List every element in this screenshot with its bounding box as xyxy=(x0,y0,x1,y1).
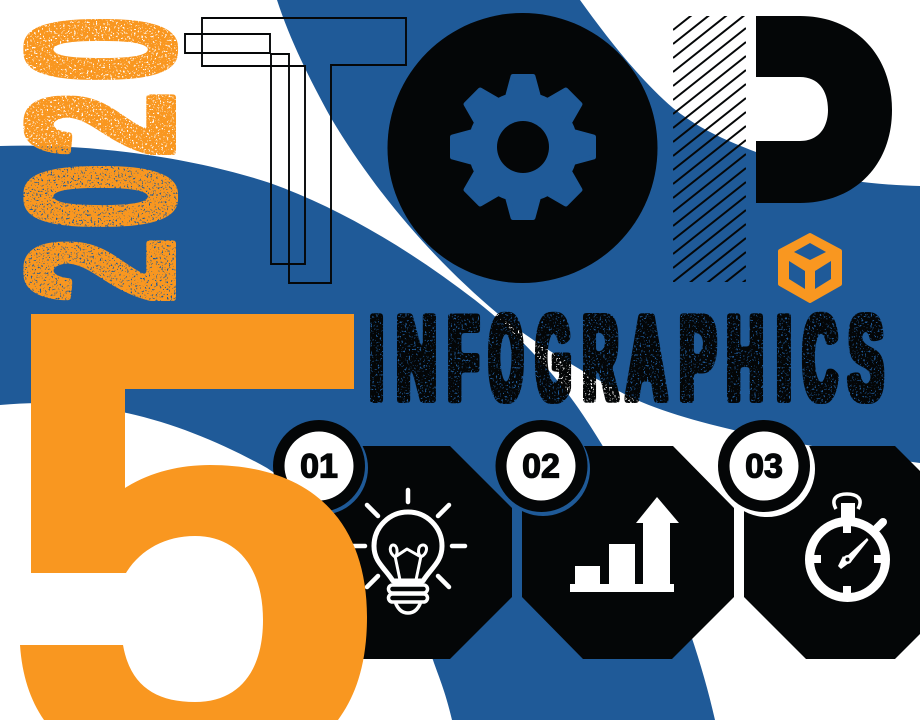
title letter O: black circle with gear xyxy=(388,13,658,283)
step 02 badge xyxy=(496,420,588,512)
heading INFOGRAPHICS, speckled: I xyxy=(776,291,792,427)
icon: light bulb xyxy=(350,490,465,613)
title letter T: outlined strokes xyxy=(185,18,406,283)
year 2020 rotated, speckled xyxy=(0,17,218,302)
step octagons with cut-outs xyxy=(300,446,920,659)
heading INFOGRAPHICS, speckled: G xyxy=(536,291,571,427)
background: upper blue swoosh xyxy=(277,0,920,463)
icon: orange cube xyxy=(780,235,840,301)
step 01 badge: 01 xyxy=(300,448,338,486)
step 02 badge: 02 xyxy=(522,448,560,486)
big orange numeral 5 xyxy=(20,314,367,720)
title letter P xyxy=(756,16,892,203)
step 03 badge: 03 xyxy=(745,448,783,486)
hatched stripe panel xyxy=(673,16,746,282)
icon: gear xyxy=(452,76,594,218)
heading INFOGRAPHICS, speckled: F xyxy=(448,289,479,426)
heading INFOGRAPHICS, speckled: H xyxy=(727,289,763,426)
heading INFOGRAPHICS, speckled: I xyxy=(370,290,383,426)
icon: stopwatch xyxy=(810,494,886,598)
heading INFOGRAPHICS, speckled: A xyxy=(626,291,667,427)
icon: rising bar chart with arrow xyxy=(570,497,679,592)
heading INFOGRAPHICS, speckled: C xyxy=(803,289,837,426)
heading INFOGRAPHICS, speckled: S xyxy=(848,290,883,426)
heading INFOGRAPHICS, speckled: R xyxy=(583,290,618,426)
heading INFOGRAPHICS, speckled: N xyxy=(396,291,437,427)
step 01 badge xyxy=(273,420,365,512)
background: lower blue swoosh xyxy=(0,146,715,720)
step 03 badge xyxy=(718,420,810,512)
heading INFOGRAPHICS, speckled: O xyxy=(489,291,523,427)
heading INFOGRAPHICS, speckled: P xyxy=(679,291,716,427)
heading INFOGRAPHICS, speckled xyxy=(370,289,883,427)
